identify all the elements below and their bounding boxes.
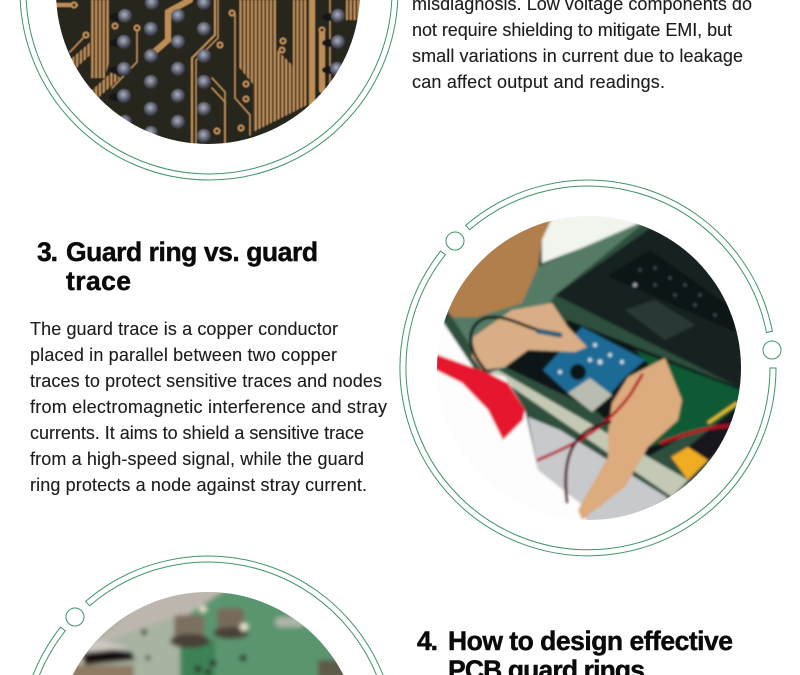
text: section 2 continued: can affect output and readings. [412,72,665,92]
heading: section 4 [417,626,733,675]
text: section 3 body: from a high-speed signal, while the guard [30,449,364,469]
heading: section 4: 4. [417,626,438,656]
text: section 3 body: placed in parallel between two copper [30,345,337,365]
text: section 3 body: from electromagnetic interference and stray [30,397,387,417]
photo: technician testing a circuit board [437,216,741,520]
heading: section 3: trace [66,266,131,296]
heading: section 3: 3. [37,237,58,267]
ring: section 3 frame [400,180,781,556]
text: section 2 continued: small variations in current due to leakage [412,46,743,66]
text: section 3 body [30,319,387,495]
ring: section 4 frame [20,556,396,675]
text: section 2 continued [412,0,752,92]
text: section 2 continued: not require shielding to mitigate EMI, but [412,20,732,40]
text: section 3 body: currents. It aims to shield a sensitive trace [30,423,364,443]
heading: section 4: How to design effective [448,626,733,656]
heading: section 3 [37,237,318,296]
ring: section 2 frame [20,0,398,180]
photo: PCB traces and solder balls [50,0,370,150]
text: section 3 body: The guard trace is a copper conductor [30,319,338,339]
photo: circuit board with capacitors [72,592,344,675]
heading: section 3: Guard ring vs. guard [66,237,318,267]
text: section 3 body: traces to protect sensitive traces and nodes [30,371,382,391]
text: section 3 body: ring protects a node against stray current. [30,475,367,495]
